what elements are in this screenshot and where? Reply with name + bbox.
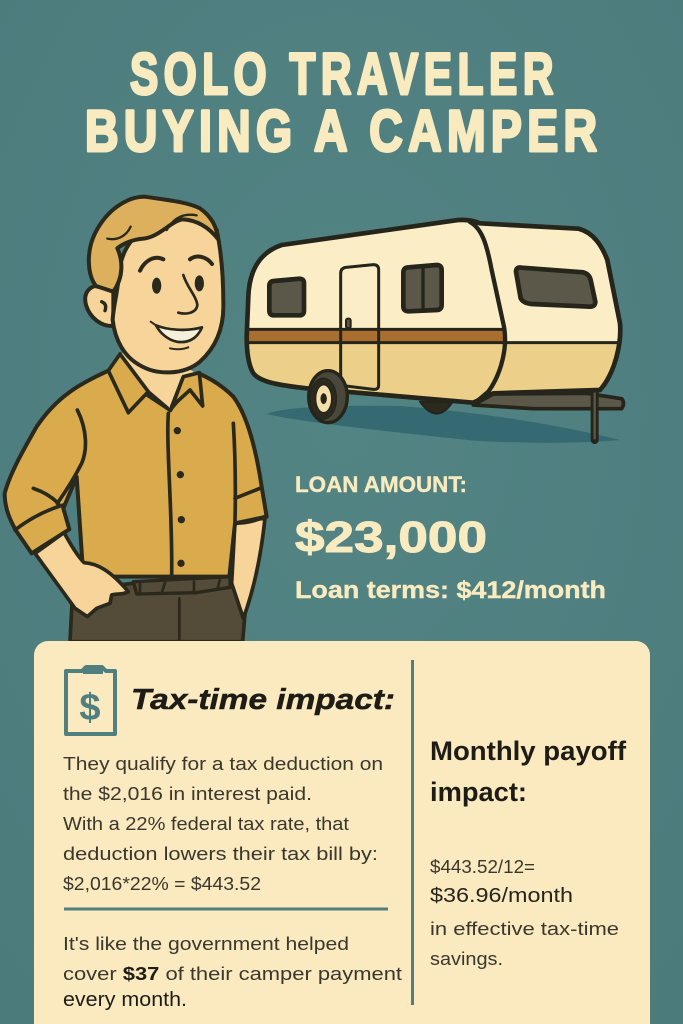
tax deduction explanation: With a 22% federal tax rate, that [63, 814, 349, 834]
title [85, 41, 597, 164]
title: SOLO TRAVELER [130, 41, 553, 107]
title: BUYING A CAMPER [85, 99, 597, 164]
tax deduction explanation: They qualify for a tax deduction on [63, 754, 383, 774]
heading: monthly payoff impact [430, 736, 627, 807]
collar [108, 354, 203, 413]
illustration: camper trailer [240, 210, 640, 443]
panel: tax information [34, 641, 650, 1024]
right forearm [232, 518, 265, 618]
tax deduction explanation: deduction lowers their tax bill by: [63, 844, 378, 864]
icon: clipboard with dollar sign [66, 667, 115, 734]
loan details [295, 472, 606, 604]
neck [122, 353, 197, 410]
monthly payoff calculation: $443.52/12= [430, 857, 535, 877]
loan terms: Loan terms: $412/month [295, 577, 606, 604]
camper body [244, 218, 623, 405]
camper windows [269, 265, 595, 315]
hitch and jack stand [473, 367, 623, 440]
government help note: every month. [63, 989, 187, 1011]
tax deduction explanation: $2,016*22% = $443.52 [63, 874, 261, 894]
illustration: smiling man [5, 197, 267, 642]
heading: tax-time impact: Tax-time impact: [131, 684, 395, 716]
loan amount value: $23,000 [295, 513, 487, 562]
monthly payoff calculation: in effective tax-time [430, 919, 619, 939]
loan amount label: LOAN AMOUNT: [295, 472, 467, 497]
trousers and belt [70, 577, 245, 642]
left hand on hip [35, 533, 128, 617]
camper wheel [309, 371, 347, 423]
monthly payoff calculation: savings. [430, 949, 503, 969]
face: brows, eyes, nose, mouth [140, 257, 212, 271]
head [85, 197, 223, 372]
government help note: cover $37 of their camper payment [63, 964, 402, 984]
shirt [5, 370, 267, 577]
monthly payoff calculation: $36.96/month [430, 885, 573, 907]
tax deduction explanation: the $2,016 in interest paid. [63, 784, 312, 804]
camper ground shadow [267, 406, 620, 443]
government help note [63, 934, 402, 1011]
camper axle [420, 402, 452, 414]
camper door [341, 265, 379, 389]
monthly payoff calculation [430, 857, 619, 969]
government help note: It's like the government helped [63, 934, 349, 954]
heading: monthly payoff impact: impact: [430, 777, 527, 807]
tax deduction explanation [63, 754, 383, 894]
heading: monthly payoff impact: Monthly payoff [430, 736, 627, 766]
icon: clipboard with dollar sign: $ [79, 687, 101, 729]
hair [89, 197, 218, 292]
